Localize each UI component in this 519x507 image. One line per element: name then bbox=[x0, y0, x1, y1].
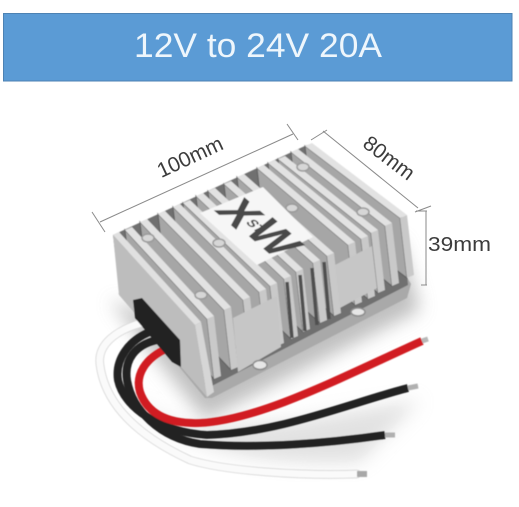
mounting holes bbox=[253, 308, 365, 370]
left end face bbox=[113, 232, 214, 397]
dimension: length 100mm bbox=[92, 124, 298, 232]
product photo: converter with wires bbox=[100, 143, 428, 474]
fin troughs bbox=[113, 145, 408, 388]
wire: red bbox=[139, 339, 428, 423]
wire: black upper bbox=[118, 331, 418, 435]
white logo label: W bbox=[233, 213, 314, 263]
dimension: height 39mm: 39mm bbox=[428, 234, 491, 256]
wire: black lower bbox=[127, 340, 395, 446]
title banner: 12V to 24V 20A bbox=[134, 27, 382, 65]
dimension: length 100mm: 100mm bbox=[154, 132, 227, 183]
dimension: width 80mm: 80mm bbox=[358, 132, 419, 185]
white logo label bbox=[200, 187, 314, 265]
wire shadow bbox=[130, 400, 420, 463]
dark fin gaps bbox=[287, 262, 329, 338]
flat front blocks bbox=[233, 246, 377, 372]
wire: white bbox=[100, 322, 367, 474]
wire connector grommet bbox=[133, 298, 181, 367]
white logo label: X bbox=[204, 192, 275, 234]
base plate bbox=[118, 262, 411, 398]
white logo label: ST bbox=[242, 217, 270, 235]
dimension: width 80mm bbox=[311, 130, 431, 212]
heat sink fins bbox=[125, 143, 414, 379]
title banner bbox=[4, 14, 512, 81]
studs bbox=[142, 163, 369, 299]
dimension: height 39mm bbox=[416, 211, 491, 285]
drop shadow bbox=[110, 240, 420, 420]
